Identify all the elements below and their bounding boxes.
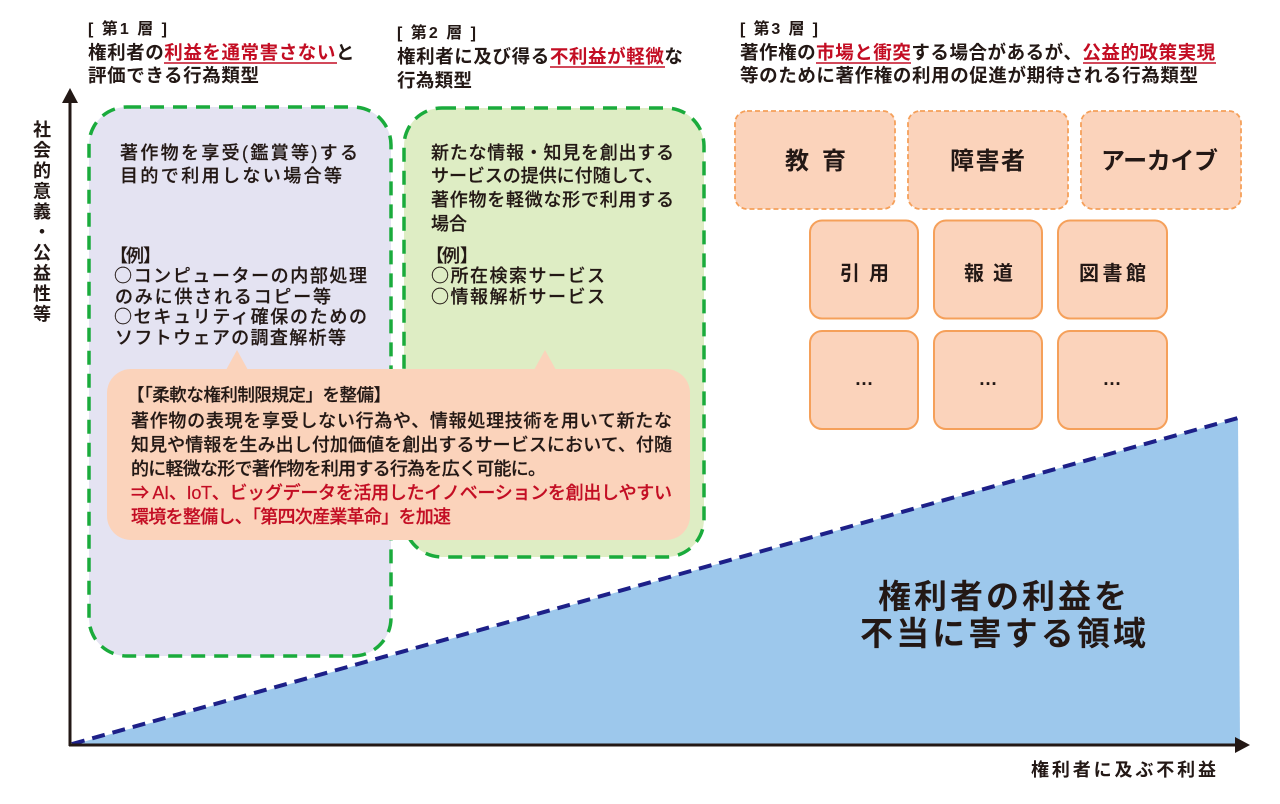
text: area that unduly harms rights holders: 権利者の利益を: [878, 578, 1127, 615]
tier 2 examples: 【例】: [426, 242, 478, 268]
heading: tier 2: 行為類型: [397, 70, 472, 91]
tier 2 examples: ○情報解析サービス: [431, 283, 605, 309]
box: other 1: …: [854, 369, 874, 390]
callout: flexible rights limitation provisions: 知見や情報を生み出し付加価値を創出するサービスにおいて、付随: [131, 435, 672, 455]
heading: tier 3: [ 第3 層 ]: [740, 19, 818, 38]
tier 1 examples: ソフトウェアの調査解析等: [115, 328, 346, 348]
tier 2 description: 新たな情報・知見を創出する: [431, 143, 674, 163]
callout: flexible rights limitation provisions: 環境を整備し、「第四次産業革命」を加速: [131, 507, 451, 527]
tier 1 description: [120, 143, 358, 186]
box: other 3: …: [1102, 369, 1122, 390]
box: other 2: [934, 331, 1042, 429]
box: archive: [1081, 111, 1241, 209]
vertical axis arrow: [62, 88, 78, 746]
tier 2 description: サービスの提供に付随して、: [431, 166, 663, 186]
callout: flexible rights limitation provisions: 【「柔軟な権利制限規定」を整備】: [127, 385, 391, 405]
box: other 1: [810, 331, 918, 429]
box: education: [735, 111, 895, 209]
heading: tier 3: 著作権の市場と衝突する場合があるが、公益的政策実現: [740, 42, 1216, 63]
heading: tier 2: [397, 23, 684, 91]
heading: tier 1: [88, 19, 355, 86]
panel: tier 2: [404, 108, 704, 557]
tier 2 examples: ○所在検索サービス: [431, 262, 605, 288]
heading: tier 2: [ 第2 層 ]: [397, 23, 476, 42]
tier 1 examples: ○コンピューターの内部処理: [114, 262, 367, 288]
vertical axis label: 社会的意義・公益性等: [31, 120, 51, 325]
tier 1 examples: [110, 242, 367, 348]
tier 1 examples: ○セキュリティ確保のための: [114, 303, 367, 329]
tier 2 examples: [426, 242, 605, 309]
box: people with disabilities: 障害者: [950, 148, 1025, 175]
tier 2 description: 場合: [431, 214, 467, 234]
tier 1 examples: 【例】: [110, 242, 161, 268]
callout: flexible rights limitation provisions: ⇒ AI、IoT、ビッグデータを活用したイノベーションを創出しやすい: [131, 482, 672, 503]
box: education: 教 育: [785, 148, 846, 175]
heading: tier 1: 評価できる行為類型: [88, 65, 259, 86]
callout: flexible rights limitation provisions: 著作物の表現を享受しない行為や、情報処理技術を用いて新たな: [131, 411, 672, 431]
box: news reporting: 報 道: [964, 262, 1013, 285]
box: archive: アーカイブ: [1101, 147, 1218, 175]
box: other 3: [1058, 331, 1167, 429]
heading: tier 3: 等のために著作権の利用の促進が期待される行為類型: [740, 65, 1198, 86]
callout: flexible rights limitation provisions: 的に軽微な形で著作物を利用する行為を広く可能に。: [131, 459, 546, 479]
tier 2 description: 著作物を軽微な形で利用する: [431, 190, 674, 210]
box: library: [1058, 220, 1167, 318]
callout: flexible rights limitation provisions: [107, 350, 690, 540]
tier 2 description: [431, 143, 674, 234]
triangle: area that unduly harms rights holders: [72, 418, 1240, 745]
tier 1 description: 著作物を享受(鑑賞等)する: [120, 143, 358, 163]
box: other 2: …: [978, 369, 998, 390]
heading: tier 3: [740, 19, 1216, 86]
text: area that unduly harms rights holders: [860, 578, 1146, 652]
heading: tier 1: [ 第1 層 ]: [88, 19, 167, 38]
heading: tier 1: 権利者の利益を通常害さないと: [88, 42, 355, 63]
panel: tier 1: [89, 107, 391, 656]
text: area that unduly harms rights holders: 不当に害する領域: [860, 615, 1146, 652]
box: quotation: 引 用: [840, 262, 889, 285]
box: library: 図書館: [1079, 262, 1146, 285]
box: people with disabilities: [908, 111, 1068, 209]
box: quotation: [810, 220, 918, 318]
horizontal axis arrow: [69, 737, 1250, 753]
box: news reporting: [934, 220, 1042, 318]
heading: tier 2: 権利者に及び得る不利益が軽微な: [397, 46, 684, 67]
tier 1 description: 目的で利用しない場合等: [120, 166, 342, 186]
tier 1 examples: のみに供されるコピー等: [115, 287, 331, 307]
horizontal axis label: 権利者に及ぶ不利益: [1031, 760, 1216, 780]
